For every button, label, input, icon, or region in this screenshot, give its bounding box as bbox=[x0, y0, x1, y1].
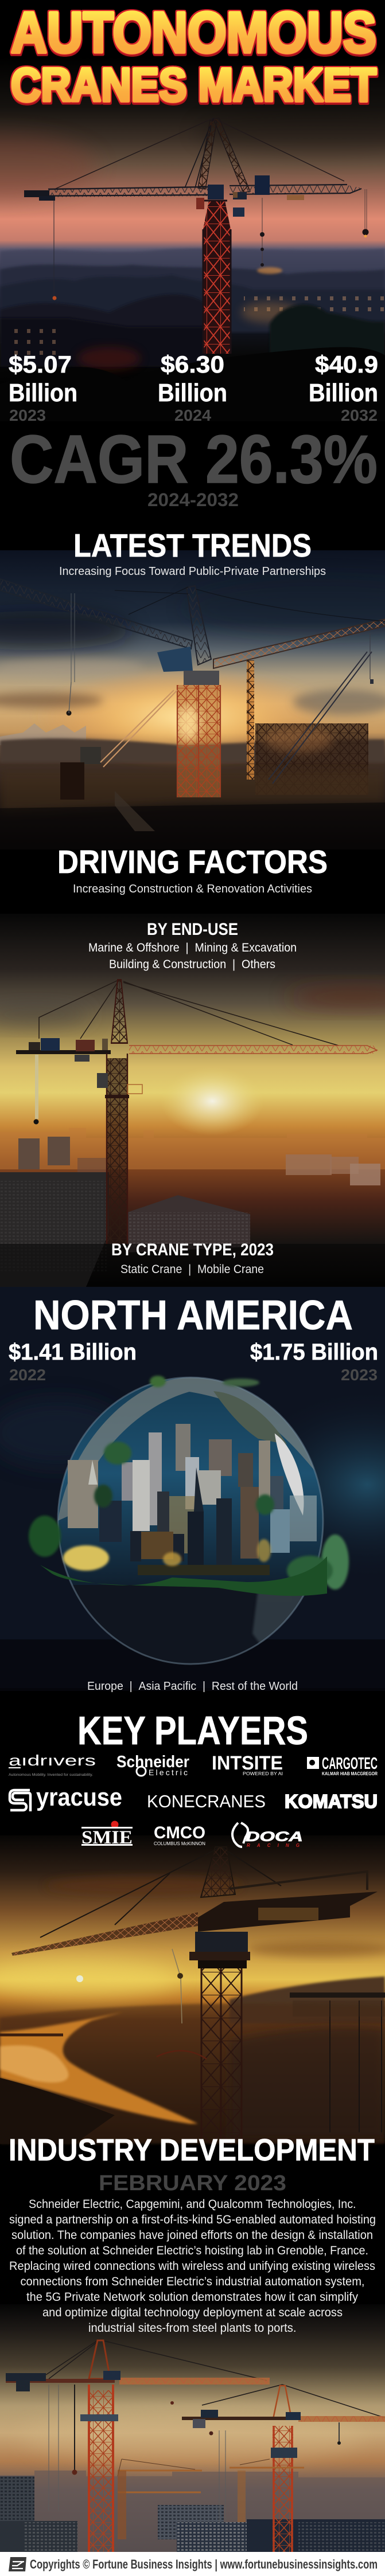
text: driving factor detail: Increasing Construction & Renovation Activities bbox=[73, 883, 312, 895]
crane: hero tower crane bbox=[24, 118, 368, 354]
logo: syracuse: yracuse bbox=[36, 1783, 122, 1811]
logo: schneider electric: Schneider bbox=[116, 1753, 189, 1771]
text: industry development paragraph: solution. The companies have joined efforts on the design & installation bbox=[11, 2229, 373, 2242]
crane: distant cranes bbox=[118, 2459, 304, 2539]
crane: right tower crane bbox=[170, 2385, 385, 2552]
stat: 2032 market size: $40.9 bbox=[315, 351, 378, 378]
stat: north america 2022 bbox=[9, 1340, 137, 1384]
stat: north america 2023 bbox=[250, 1340, 378, 1384]
stat: 2023 market size bbox=[9, 351, 77, 424]
text: other regions: Europe | Asia Pacific | Rest of the World bbox=[87, 1680, 298, 1693]
CAGR period: 2024-2032 bbox=[147, 490, 239, 510]
stat: north america 2023: 2023 bbox=[341, 1366, 378, 1384]
illustration: glass globe with city bbox=[29, 1376, 349, 1671]
logo: doca racing bbox=[232, 1823, 303, 1848]
stat: 2024 market size bbox=[158, 351, 227, 424]
crane: segmentation tower crane bbox=[16, 980, 377, 1244]
text: end-use segments: Building & Construction | Others bbox=[109, 958, 275, 971]
icon: fortune business insights logo bbox=[9, 2557, 26, 2571]
logo: smie: SMIE bbox=[81, 1827, 133, 1848]
text: industry development paragraph: signed a partnership on a first-of-its-kind 5G-enabled automated hoisting bbox=[9, 2213, 376, 2226]
stat: 2023 market size: Billion bbox=[9, 379, 77, 407]
stat: north america 2022: 2022 bbox=[9, 1366, 46, 1384]
panel: segmentation photo bbox=[0, 914, 385, 1290]
stat: 2024 market size: 2024 bbox=[174, 406, 211, 424]
logo: intsite: POWERED BY AI bbox=[243, 1771, 283, 1776]
panel: industry development photo bbox=[0, 2304, 385, 2552]
stat: 2024 market size: Billion bbox=[158, 379, 227, 407]
heading: by end-use: BY END-USE bbox=[147, 920, 238, 939]
logo: doca racing: RACING bbox=[247, 1843, 300, 1848]
logo: cargotec bbox=[307, 1755, 378, 1776]
text: end-use segments: Marine & Offshore | Mining & Excavation bbox=[88, 941, 297, 954]
logo: doca racing: DOCA bbox=[246, 1829, 303, 1845]
logo: cmco columbus mckinnon: CMCO bbox=[154, 1823, 205, 1842]
text: industry development paragraph: and optimize digital technology deployment at scale across bbox=[42, 2306, 343, 2319]
stat: 2032 market size: 2032 bbox=[341, 406, 378, 424]
river bbox=[0, 2012, 198, 2124]
panel: key players photo bbox=[0, 1835, 385, 2145]
skyline buildings bbox=[68, 1424, 290, 1569]
text: industry development paragraph: connections from Schneider Electric’s industrial automation system, bbox=[21, 2275, 365, 2288]
stat: north america 2022: $1.41 Billion bbox=[9, 1340, 137, 1365]
crane: trends tower crane bbox=[0, 579, 385, 797]
text: latest trend detail: Increasing Focus Toward Public-Private Partnerships bbox=[59, 565, 326, 578]
text: industry development paragraph: Schneider Electric, Capgemini, and Qualcomm Technologies, Inc. bbox=[29, 2198, 356, 2211]
heading: key players: KEY PLAYERS bbox=[77, 1708, 308, 1753]
logo: aidrivers: aıdrıvers bbox=[9, 1752, 96, 1769]
text: industry development paragraph bbox=[9, 2198, 376, 2335]
logo: konecranes: KONECRANES bbox=[147, 1791, 266, 1811]
footer bbox=[0, 2552, 385, 2576]
stat: north america 2023: $1.75 Billion bbox=[250, 1340, 378, 1365]
crane: background jib bbox=[290, 1992, 385, 2132]
heading: north america: NORTH AMERICA bbox=[33, 1293, 353, 1338]
greenery and lights bbox=[29, 1376, 349, 1596]
text: industry development paragraph: of the solution at Schneider Electric’s hoisting lab in Grenoble, France. bbox=[16, 2244, 368, 2257]
crane: key players luffing crane bbox=[11, 1847, 378, 2144]
panel: regional globe photo bbox=[0, 1287, 385, 1691]
stat: 2024 market size: $6.30 bbox=[161, 351, 224, 378]
logo: aidrivers bbox=[9, 1752, 96, 1777]
logo: intsite: INTSITE bbox=[212, 1752, 283, 1774]
text: end-use segments bbox=[88, 941, 297, 971]
logo: aidrivers: Autonomous Mobility. Invented for sustainability. bbox=[9, 1773, 93, 1777]
title bbox=[11, 1, 376, 111]
panel: hero crane photo bbox=[0, 57, 385, 424]
text: industry development paragraph: the 5G Private Network solution demonstrates how it can simplify bbox=[26, 2291, 358, 2304]
text: industry development paragraph: industrial sites-from steel plants to ports. bbox=[88, 2321, 296, 2335]
crane: left tower crane bbox=[6, 2339, 270, 2552]
text: industry development paragraph: Replacing wired connections with wireless and unifying existing wireless bbox=[9, 2260, 375, 2273]
heading: driving factors: DRIVING FACTORS bbox=[57, 844, 328, 880]
text: crane type segments: Static Crane | Mobile Crane bbox=[120, 1263, 264, 1276]
heading: latest trends: LATEST TRENDS bbox=[73, 527, 312, 564]
stat: 2023 market size: 2023 bbox=[9, 406, 46, 424]
logo: schneider electric: Electric bbox=[149, 1768, 188, 1777]
stat: 2032 market size bbox=[309, 351, 378, 424]
stat: 2032 market size: Billion bbox=[309, 379, 378, 407]
logo: cmco columbus mckinnon: COLUMBUS McKINNON bbox=[154, 1841, 205, 1846]
stat: 2023 market size: $5.07 bbox=[9, 351, 72, 378]
logo: komatsu: KOMATSU bbox=[285, 1791, 378, 1812]
panel: latest trends photo bbox=[0, 550, 385, 849]
date: february 2023: FEBRUARY 2023 bbox=[99, 2171, 286, 2195]
heading: by crane type: BY CRANE TYPE, 2023 bbox=[111, 1240, 274, 1259]
